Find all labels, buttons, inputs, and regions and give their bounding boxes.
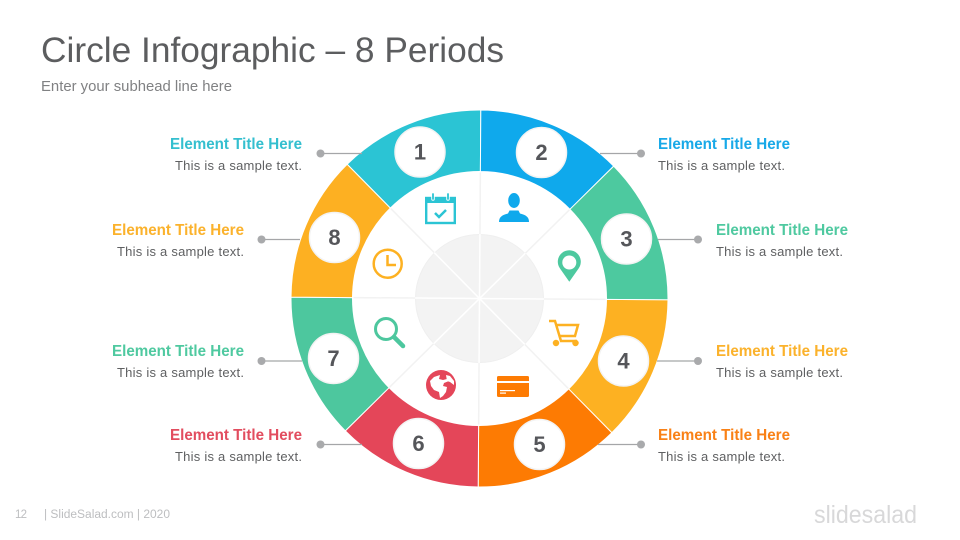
segment 3 <box>569 166 669 300</box>
segment 5 <box>478 388 612 488</box>
number badge 6 <box>394 418 444 468</box>
segment 1 <box>347 109 481 209</box>
label 2: This is a sample text. <box>658 158 785 173</box>
icon: credit card <box>497 376 529 397</box>
label 2: Element Title Here <box>658 136 790 153</box>
title: Circle Infographic – 8 Periods <box>41 31 504 70</box>
segment 4 <box>568 299 668 433</box>
footer: 12 <box>15 509 27 521</box>
label 7: This is a sample text. <box>117 365 244 380</box>
label 3: Element Title Here <box>716 222 848 239</box>
number badge 8 <box>310 212 360 262</box>
icon: shopping cart <box>549 321 578 345</box>
label 5: This is a sample text. <box>658 449 785 464</box>
icon: person <box>499 193 529 222</box>
number badge 4 <box>598 336 648 386</box>
number badge 5 <box>514 420 564 470</box>
number badge 7: 7 <box>327 346 340 371</box>
label 8 <box>112 222 300 259</box>
footer: | SlideSalad.com | 2020 <box>44 509 170 521</box>
label 6 <box>170 427 362 464</box>
number badge 1 <box>395 127 445 177</box>
label 4 <box>657 343 848 380</box>
number badge 1: 1 <box>414 140 426 164</box>
number badge 3 <box>602 214 652 264</box>
label 8: Element Title Here <box>112 222 244 239</box>
label 3: This is a sample text. <box>716 244 843 259</box>
label 8: This is a sample text. <box>117 244 244 259</box>
number badge 4: 4 <box>617 348 630 374</box>
segment 2 <box>480 110 614 210</box>
circle ring segments <box>290 109 669 488</box>
number badge 2 <box>516 128 566 178</box>
segment 8 <box>291 164 391 298</box>
label 4: This is a sample text. <box>716 365 843 380</box>
number badge 3: 3 <box>620 226 633 252</box>
icon: globe <box>426 370 456 400</box>
label 2 <box>600 136 790 173</box>
label 1: Element Title Here <box>170 136 302 153</box>
number badge 2: 2 <box>535 140 548 165</box>
segment 7 <box>290 297 390 431</box>
label 1 <box>170 136 362 173</box>
number badge 6: 6 <box>412 431 425 456</box>
label 5 <box>598 427 790 464</box>
label 3 <box>658 222 848 259</box>
label 7 <box>112 343 302 380</box>
label 5: Element Title Here <box>658 427 790 444</box>
icon: magnifier <box>376 318 403 346</box>
icon: clock <box>374 250 402 278</box>
number badge 5: 5 <box>533 432 546 457</box>
segment 6 <box>345 387 479 487</box>
logo wordmark: slidesalad <box>814 501 917 529</box>
number badge 7 <box>308 334 358 384</box>
number badge 8: 8 <box>328 225 341 250</box>
inner disc with hub <box>352 171 607 426</box>
label 6: Element Title Here <box>170 427 302 444</box>
label 4: Element Title Here <box>716 343 848 360</box>
label 6: This is a sample text. <box>175 449 302 464</box>
icon: location pin <box>558 250 581 282</box>
label 1: This is a sample text. <box>175 158 302 173</box>
subhead: Enter your subhead line here <box>41 78 232 95</box>
label 7: Element Title Here <box>112 343 244 360</box>
icon: calendar <box>425 194 456 223</box>
